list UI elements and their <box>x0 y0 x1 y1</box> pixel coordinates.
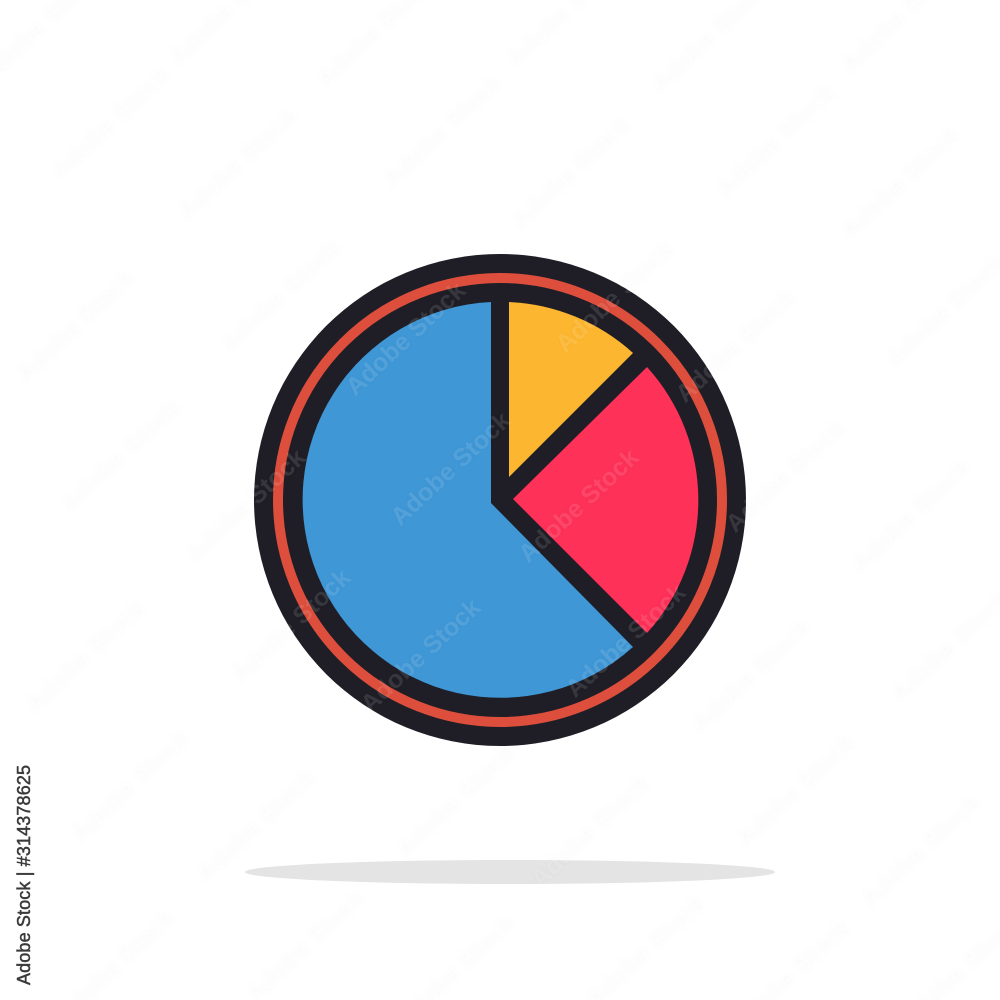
stock watermarks: Adobe Stock <box>550 233 681 358</box>
stock watermarks: Adobe Stock <box>845 453 976 578</box>
pie slice: blue <box>303 302 633 698</box>
stock watermarks: Adobe Stock <box>340 276 471 401</box>
stock watermarks: Adobe Stock <box>55 393 186 518</box>
stock watermarks: Adobe Stock <box>45 60 176 185</box>
stock watermarks: Adobe Stock <box>505 110 636 235</box>
icon: outer dark disc <box>254 254 746 746</box>
pie slice: pink <box>513 367 698 633</box>
stock watermarks: Adobe Stock <box>377 68 508 193</box>
pie slice: yellow <box>509 302 633 477</box>
icon: red ring <box>278 278 722 722</box>
stock watermarks: Adobe Stock <box>65 723 196 848</box>
stock watermarks: Adobe Stock <box>172 101 303 226</box>
stock watermarks: Adobe Stock <box>710 78 841 203</box>
stock watermarks: Adobe Stock <box>190 763 321 888</box>
side credit text: Adobe Stock | #314378625 <box>14 765 34 985</box>
stock watermarks: Adobe Stock <box>835 120 966 245</box>
stock watermarks: Adobe Stock <box>855 788 986 913</box>
stock watermarks: Adobe Stock <box>10 263 141 388</box>
stock watermarks: Adobe Stock <box>20 593 151 718</box>
stock watermarks: Adobe Stock <box>390 738 521 863</box>
stock watermarks: Adobe Stock <box>215 233 346 358</box>
stock watermarks: Adobe Stock <box>560 578 691 703</box>
stock watermarks: Adobe Stock <box>730 728 861 853</box>
stock watermarks: Adobe Stock <box>225 563 356 688</box>
stock watermarks: Adobe Stock <box>670 283 801 408</box>
stock watermarks: Adobe Stock <box>385 406 516 531</box>
stock watermarks: Adobe Stock <box>513 443 644 568</box>
pie chart icon <box>254 254 746 746</box>
ground shadow <box>245 860 775 884</box>
stock watermarks: Adobe Stock <box>525 768 656 893</box>
stock watermarks: Adobe Stock <box>685 613 816 738</box>
stock watermarks: Adobe Stock <box>180 443 311 568</box>
stock watermarks: Adobe Stock <box>355 593 486 718</box>
stock watermarks: Adobe Stock <box>720 413 851 538</box>
